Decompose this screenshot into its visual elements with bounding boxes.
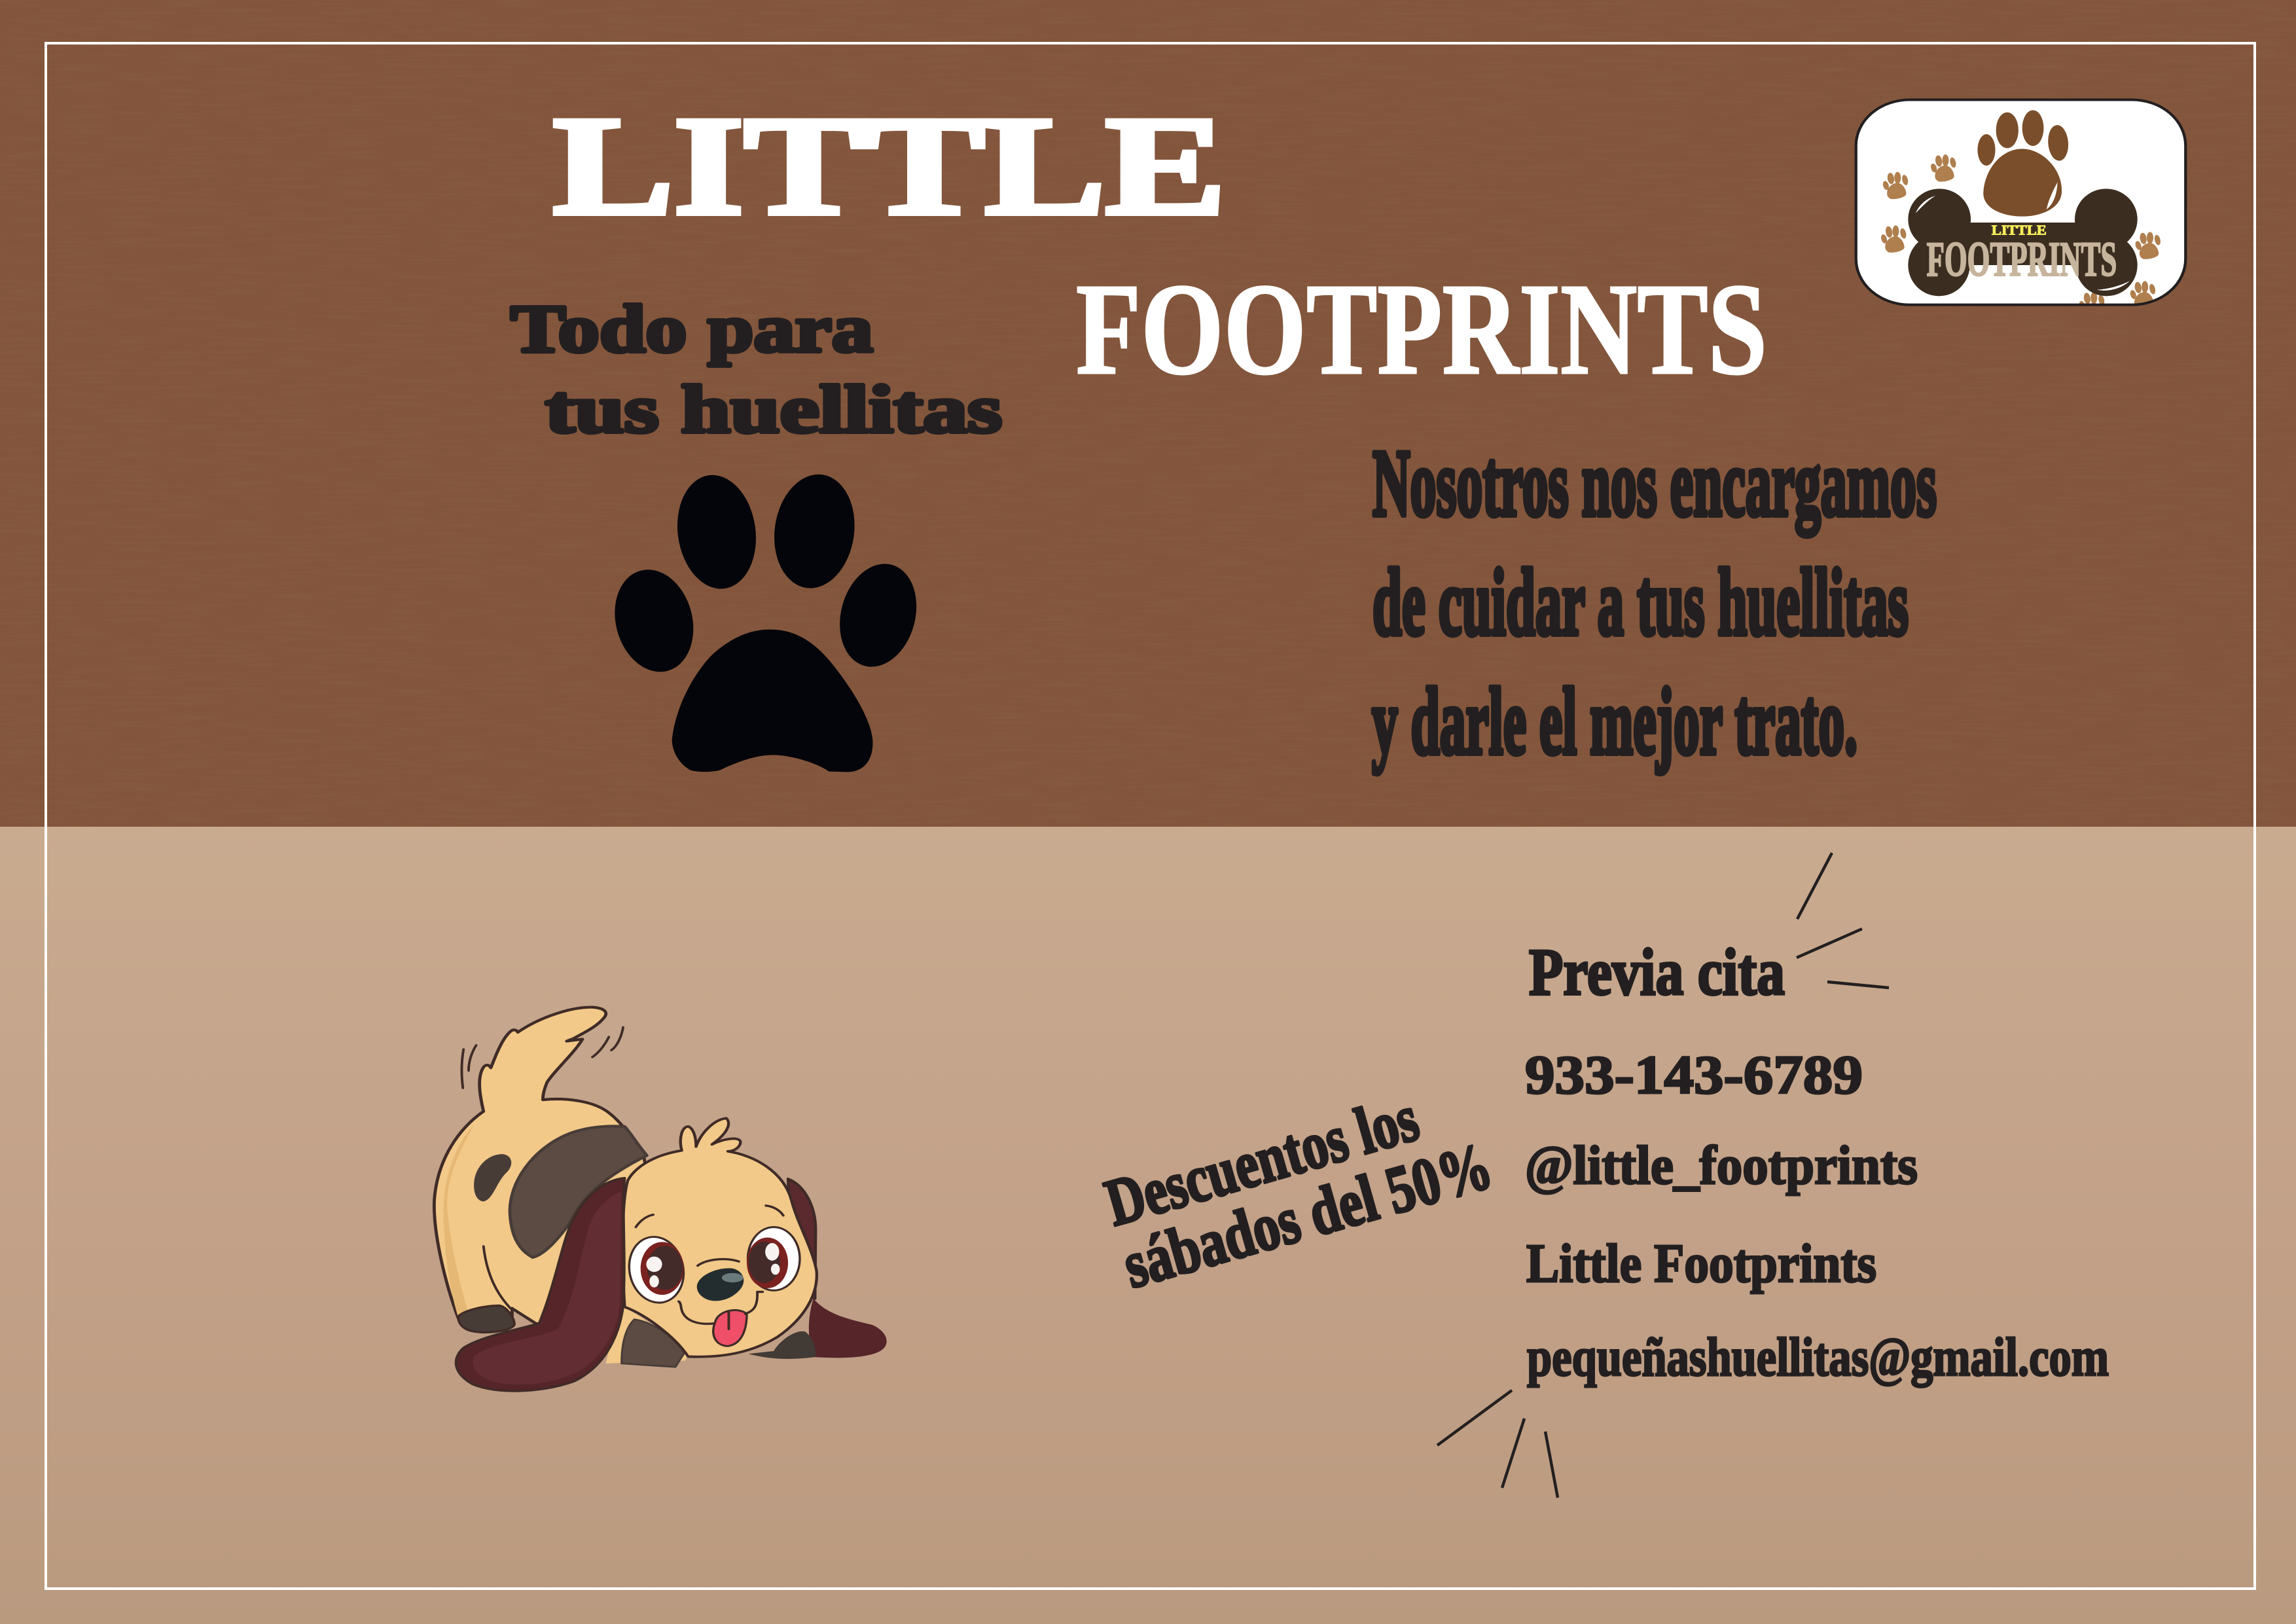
- right eye: [747, 1227, 800, 1290]
- background: dark brown upper band: [0, 0, 2296, 827]
- tagline: Todo para tus huellitas: Todo para: [511, 291, 873, 367]
- tongue: [713, 1310, 747, 1346]
- body shading: [444, 1125, 474, 1316]
- body spot: [474, 1154, 511, 1201]
- back saddle patch: [510, 1126, 647, 1257]
- small paw prints: [1880, 154, 2161, 319]
- discount callout: Descuentos los: [1098, 1081, 1426, 1240]
- large brown paw: [1977, 110, 2070, 217]
- background: light tan lower band: [0, 827, 2296, 1624]
- left eye: [624, 1234, 689, 1306]
- accent rays: lower left: [1437, 1390, 1558, 1498]
- icon: black paw print: [603, 469, 927, 772]
- hind leg inner line: [484, 1246, 511, 1308]
- body and tail: [434, 1007, 660, 1329]
- contact list: Little Footprints: [1526, 1233, 1876, 1294]
- front paw: [622, 1320, 686, 1367]
- nose: [697, 1269, 744, 1301]
- bone: [1908, 189, 2138, 296]
- title: FOOTPRINTS: FOOTPRINTS: [1076, 257, 1767, 402]
- tagline: Todo para tus huellitas: [511, 291, 1002, 447]
- head: [622, 1118, 817, 1357]
- tagline: Todo para tus huellitas: tus huellitas: [545, 372, 1002, 447]
- contact list: Previa cita: [1529, 935, 1785, 1009]
- contact list: pequeñashuellitas@gmail.com: [1527, 1327, 2109, 1388]
- contact list: [1525, 935, 2109, 1388]
- contact list: 933-143-6789: [1525, 1045, 1863, 1106]
- accent rays: upper right: [1797, 853, 1889, 988]
- illustration: playful puppy: [434, 1007, 887, 1391]
- facial lines and motion marks: [462, 1027, 783, 1329]
- hind leg paw: [458, 1306, 514, 1332]
- logo: Little Footprints badge: [1856, 99, 2185, 319]
- right ear and paw behind head: [748, 1179, 887, 1359]
- discount callout: sábados del 50%: [1115, 1128, 1499, 1303]
- title: LITTLE: LITTLE: [553, 88, 1226, 244]
- logo text: LITTLE: [1992, 223, 2047, 238]
- text block: Nosotros nos encargamos: y darle el mejor trato.: [1372, 668, 1857, 774]
- left long ear: [456, 1178, 624, 1391]
- text block: Nosotros nos encargamos: [1372, 430, 1937, 774]
- contact list: @little_footprints: [1525, 1135, 1918, 1196]
- front body below ear: [605, 1304, 691, 1363]
- logo: Little Footprints badge: FOOTPRINTS: [1927, 231, 2117, 286]
